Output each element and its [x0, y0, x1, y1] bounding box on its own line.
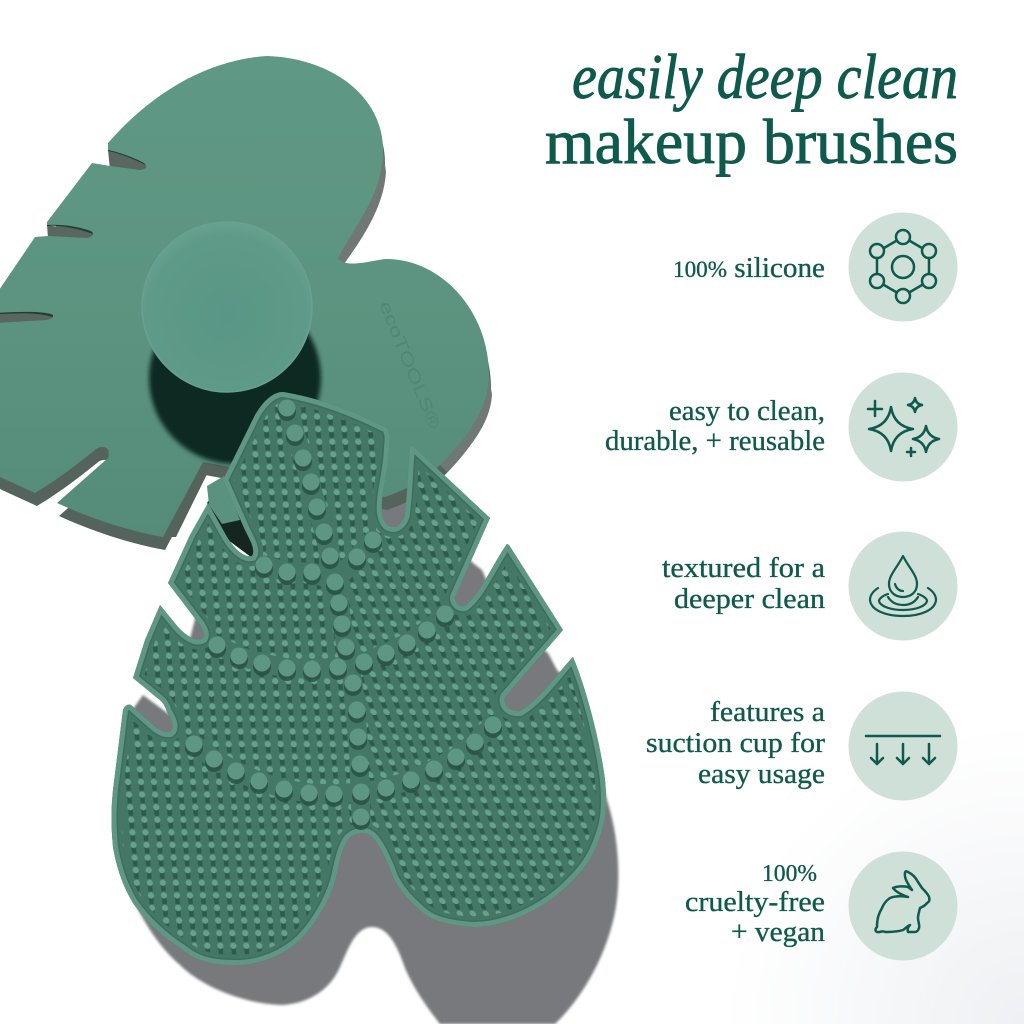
icon: rabbit: [876, 871, 929, 932]
product: silicone brush cleaning mats: [0, 56, 640, 1024]
small nubs: [122, 403, 596, 954]
label: easy to clean,: [669, 395, 825, 427]
label: [605, 395, 825, 457]
large nubs: [186, 400, 502, 826]
label: 100% silicone: [673, 252, 825, 284]
suction cup: [142, 222, 312, 392]
feature: cruelty-free: [685, 852, 958, 960]
icon: molecule: [870, 230, 936, 303]
label: [685, 861, 825, 948]
label: 100%: [762, 861, 817, 887]
icon badge: [848, 692, 958, 800]
label: cruelty-free: [685, 886, 825, 918]
feature: textured: [662, 532, 958, 640]
icon badge: [848, 852, 958, 960]
title: [545, 41, 958, 177]
front mat textured side: [112, 392, 606, 966]
feature: easy to clean: [605, 372, 958, 482]
notch backing: [207, 476, 255, 560]
title: makeup brushes: [545, 106, 958, 177]
label: deeper clean: [674, 583, 826, 615]
label: suction cup for: [646, 727, 825, 759]
label: [646, 696, 825, 790]
feature: suction cup: [646, 692, 958, 800]
icon: sparkles: [868, 398, 939, 456]
icon: water drop with ripples: [870, 556, 936, 616]
label: [662, 552, 826, 615]
icon badge: [848, 372, 958, 482]
feature: 100% silicone: [673, 212, 958, 322]
brand deboss: ecoTOOLS®: [375, 298, 444, 432]
back mat smooth side: [0, 56, 489, 537]
label: durable, + reusable: [605, 425, 825, 457]
icon badge: [848, 532, 958, 640]
cast shadow of front mat: [117, 497, 618, 1024]
suction cup shadow: [149, 292, 321, 464]
back mat side wall: [0, 69, 492, 550]
label: + vegan: [731, 916, 825, 948]
icon badge: [848, 212, 958, 322]
label: features a: [710, 696, 825, 728]
vein clearing: [194, 408, 493, 817]
title: easily deep clean: [572, 41, 958, 112]
rim: [112, 392, 606, 965]
label: textured for a: [662, 552, 825, 584]
icon: line with down arrows: [866, 736, 940, 764]
large nub shadows: [185, 403, 502, 830]
label: easy usage: [698, 758, 825, 790]
